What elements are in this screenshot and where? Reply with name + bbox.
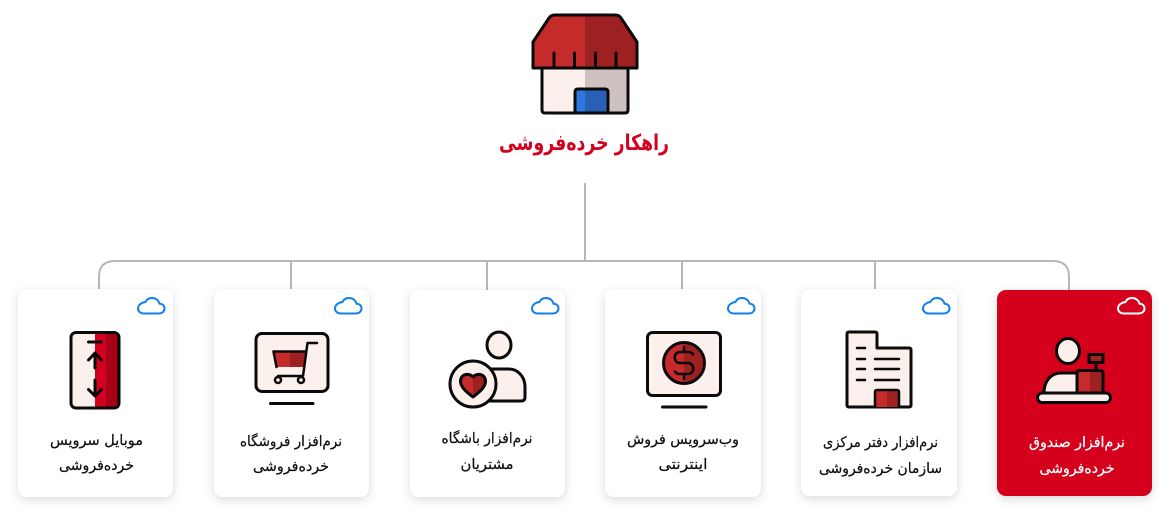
icon: office building	[847, 332, 911, 407]
label: نرم‌افزار فروشگاه	[240, 433, 342, 450]
panel: mobile service: خرده‌فروشی	[59, 458, 134, 474]
icon: mobile	[71, 332, 119, 408]
panel: online sales web service: اینترنتی	[658, 457, 708, 473]
icon: cloud	[335, 298, 362, 314]
icon: cloud	[532, 298, 558, 314]
icon: customer with heart	[450, 332, 525, 407]
panel: store software: خرده‌فروشی	[253, 459, 329, 475]
panel: retail cash register software	[997, 290, 1152, 496]
panel: customer club	[410, 290, 565, 497]
panel: mobile service	[18, 289, 173, 497]
icon: store	[533, 15, 637, 113]
panel: head office software	[801, 289, 957, 496]
panel: customer club: مشتریان	[460, 457, 514, 473]
panel: head office software: سازمان خرده‌فروشی	[819, 461, 942, 477]
icon: dollar monitor	[648, 332, 720, 407]
label: موبایل سرویس	[50, 433, 143, 449]
icon: cloud	[923, 298, 950, 314]
label: نرم‌افزار دفتر مرکزی	[823, 435, 938, 451]
panel: online sales web service	[605, 289, 761, 497]
panel: store software	[214, 289, 369, 497]
panel: retail cash register software: خرده‌فروشی	[1040, 461, 1114, 477]
label: نرم‌افزار باشگاه	[442, 430, 532, 447]
label: نرم‌افزار صندوق	[1029, 435, 1125, 451]
icon: cloud	[728, 298, 754, 314]
title: راهکار خرده‌فروشی	[499, 131, 669, 156]
icon: cloud	[138, 298, 164, 314]
icon: cashier	[1038, 338, 1110, 402]
icon: cloud	[1118, 298, 1144, 314]
icon: shopping cart monitor	[256, 334, 328, 404]
connector lines	[99, 183, 1069, 291]
label: وب‌سرویس فروش	[627, 432, 739, 448]
